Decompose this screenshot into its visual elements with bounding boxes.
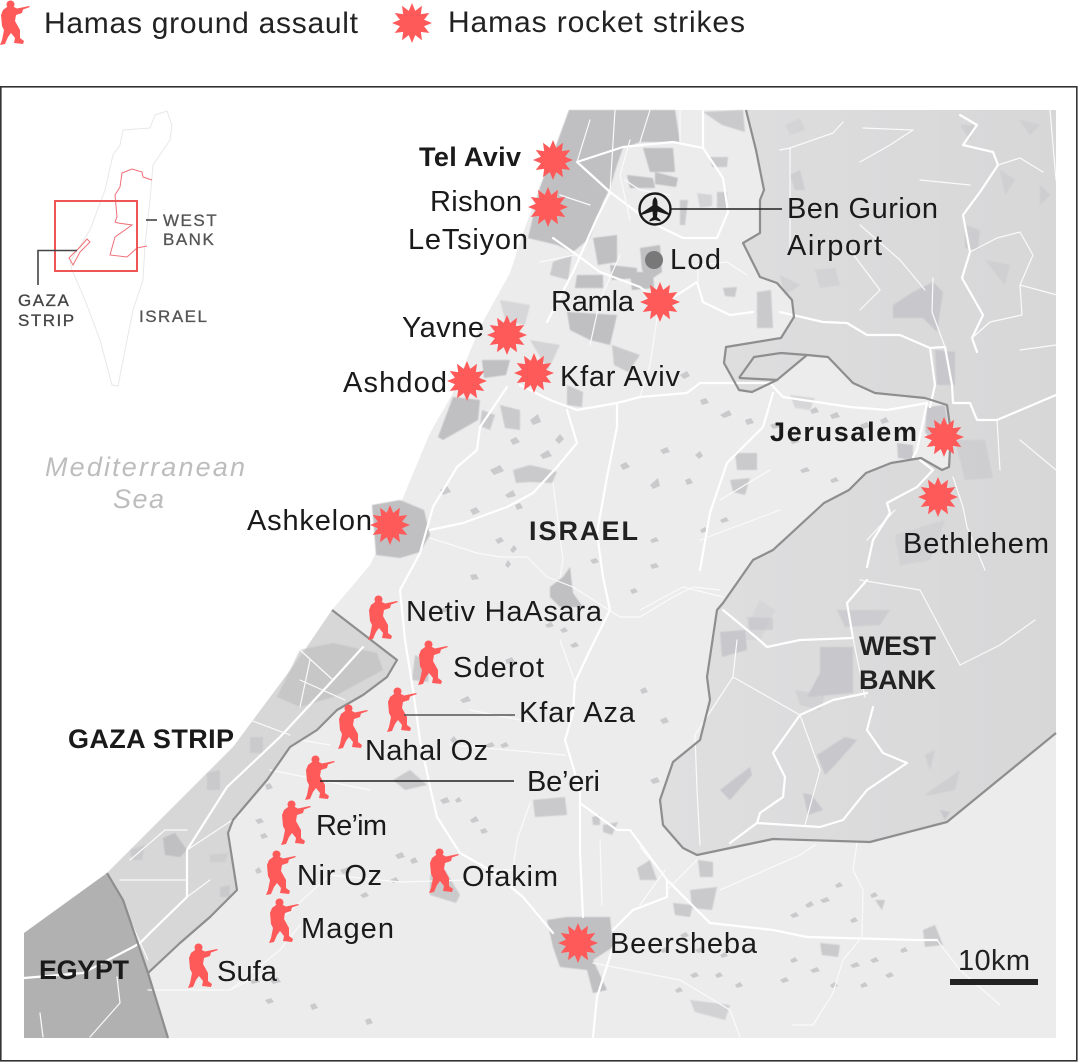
rocket strike markers: [370, 140, 964, 963]
label: Sufa: Sufa: [217, 956, 278, 988]
soldier: Magen: [269, 898, 299, 943]
label: Re'im: Re’im: [316, 810, 387, 842]
soldier: Nahal Oz: [338, 704, 368, 749]
label: Bethlehem: Bethlehem: [903, 528, 1049, 560]
label: Netiv HaAsara: Netiv HaAsara: [406, 596, 603, 628]
place labels: [39, 142, 1049, 988]
soldier: Kfar Aza: [387, 688, 417, 732]
label: Magen: Magen: [301, 913, 394, 945]
label: Ofakim: Ofakim: [462, 861, 558, 893]
legend: [0, 0, 745, 45]
label: Be'eri: Be’eri: [527, 766, 600, 798]
label: Ramla: Ramla: [551, 286, 635, 318]
star: Ashdod: [447, 361, 487, 401]
star: Rishon LeTsiyon: [528, 187, 568, 227]
inset: Israel outline: [70, 111, 172, 386]
leader line: [671, 208, 782, 210]
inset label: Strip: STRIP: [18, 311, 76, 330]
soldier: Sderot: [418, 640, 448, 685]
label: Lod: Lod: [670, 244, 721, 276]
inset: West Bank leader line: [146, 219, 157, 221]
label: Yavne: Yavne: [402, 312, 484, 344]
label: Beersheba: Beersheba: [610, 928, 758, 960]
borders: [107, 110, 1056, 1038]
star: Ramla: [640, 282, 680, 322]
inset label: West: WEST: [163, 211, 218, 230]
label: Jerusalem: Jerusalem: [770, 417, 917, 447]
scale line: [950, 979, 1038, 985]
star: Ashkelon: [370, 505, 410, 545]
icon: ground assault soldier: [0, 0, 30, 45]
label: Sderot: Sderot: [453, 652, 544, 684]
label: West: WEST: [859, 631, 936, 661]
inset label: Gaza: GAZA: [18, 291, 70, 310]
inset locator map: [18, 111, 218, 386]
urban areas: [130, 110, 1050, 1020]
soldier: Re'im: [281, 800, 311, 845]
sea label line 1: Mediterranean: [45, 452, 245, 482]
soldier: Netiv HaAsara: [368, 596, 398, 640]
label: Airport: Airport: [787, 230, 882, 262]
Lod marker: [645, 251, 663, 269]
star: Beersheba: [558, 923, 598, 963]
legend label: ground assault: Hamas ground assault: [44, 7, 359, 40]
label: Gaza Strip: GAZA STRIP: [68, 724, 234, 754]
ground assault markers: [188, 596, 459, 988]
inset: extent box: [55, 201, 137, 271]
inset label: Bank: BANK: [163, 230, 215, 249]
territory: Egypt: [24, 873, 168, 1038]
airport marker: [640, 194, 782, 224]
label: Tel Aviv: Tel Aviv: [419, 142, 521, 172]
label: Kfar Aviv: Kfar Aviv: [560, 361, 680, 393]
star: Kfar Aviv: [514, 353, 554, 393]
inset label: Israel: ISRAEL: [139, 307, 208, 326]
scale bar: [950, 945, 1038, 985]
leader line: Kfar Aza: [404, 714, 515, 716]
scale label: 10km: [958, 945, 1030, 977]
star: Yavne: [487, 315, 527, 355]
leader line: Be'eri: [320, 780, 514, 782]
label: Bank: BANK: [859, 665, 936, 695]
icon: rocket strike star: [392, 3, 432, 43]
inset: West Bank outline: [110, 169, 152, 257]
star: Tel Aviv: [533, 140, 573, 180]
soldier: Ofakim: [429, 848, 459, 893]
label: Rishon: Rishon: [430, 186, 522, 218]
soldier: Nir Oz: [266, 850, 296, 895]
inset: Gaza leader line: [38, 250, 77, 285]
star: Bethlehem: [918, 477, 958, 517]
label: Ashkelon: Ashkelon: [247, 505, 372, 537]
label: Ashdod: Ashdod: [343, 367, 447, 399]
label: Ben Gurion: Ben Gurion: [787, 193, 938, 225]
label: Egypt: EGYPT: [39, 955, 130, 985]
star: Jerusalem: [924, 417, 964, 457]
territory: Gaza Strip: [107, 610, 397, 973]
inset: Gaza outline: [69, 239, 90, 265]
soldier: Be'eri: [305, 756, 335, 800]
icon: plane: [640, 194, 670, 224]
small settlements: [250, 371, 908, 1025]
label: Nahal Oz: Nahal Oz: [365, 735, 488, 767]
label: Nir Oz: Nir Oz: [297, 860, 382, 892]
sea label line 2: Sea: [113, 484, 164, 514]
label: LeTsiyon: LeTsiyon: [408, 224, 528, 256]
label: Kfar Aza: Kfar Aza: [519, 697, 636, 729]
legend label: rocket strikes: Hamas rocket strikes: [448, 6, 745, 39]
territory: West Bank: [660, 110, 1056, 855]
label: Israel: ISRAEL: [529, 516, 638, 546]
soldier: Sufa: [188, 944, 218, 988]
sea label: [45, 452, 245, 514]
